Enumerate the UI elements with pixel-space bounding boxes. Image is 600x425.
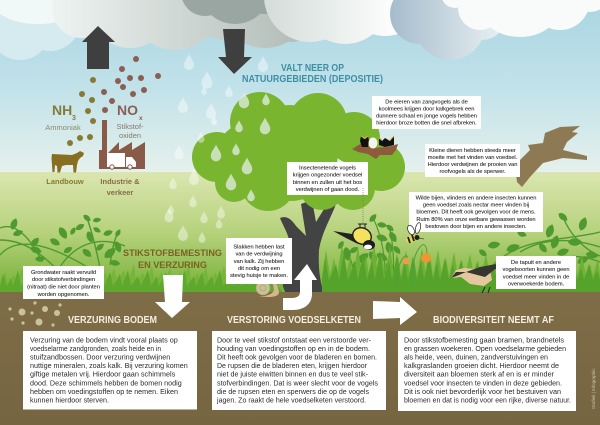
label: NH3 ammonia — [45, 102, 81, 132]
cloud: right white — [441, 0, 600, 37]
panel: food chain disruption — [212, 331, 386, 410]
callout: small animals: roofvogels als de sperwer. — [439, 169, 506, 175]
heading: deposition: VALT NEER OP — [281, 63, 344, 74]
callout: wheatear — [496, 256, 576, 289]
panel: soil acidification: Verzuring van de bodem vindt vooral plaats op — [30, 338, 178, 344]
cloud: left white — [0, 0, 85, 24]
icon: bird of prey — [516, 126, 587, 187]
callout: groundwater: (nitraat) die niet door planten — [27, 284, 100, 290]
callout: bees and butterflies — [409, 192, 543, 232]
label: industry and traffic — [100, 177, 140, 197]
panel: biodiversity declines: en grassen woekeren. Open voedselarme gebieden — [404, 346, 566, 353]
label: NH3 ammonia: 3 — [72, 115, 76, 122]
callout: groundwater — [23, 266, 104, 299]
icon: snail — [253, 279, 279, 297]
plants: right — [478, 211, 600, 275]
soil particles — [8, 301, 62, 327]
callout: wheatear: De tapuit en andere — [511, 260, 561, 266]
label: NOx nitrogen oxides — [116, 102, 144, 140]
callout: eggs — [372, 96, 481, 129]
callout: snails — [226, 238, 292, 284]
panel: biodiversity declines: voedsel voor insecten te vinden in deze gebieden. — [404, 380, 562, 388]
icon: cow — [52, 151, 84, 172]
thread of hanging bird — [362, 188, 364, 224]
callout: eggs: De eieren van zangvogels als de — [385, 100, 468, 106]
heading: deposition: NATUURGEBIEDEN (DEPOSITIE) — [242, 74, 383, 85]
heading: fertilisation and acidification: EN VERZURING — [138, 260, 207, 271]
panel: soil acidification: voedselarme zandgronden, zoals heide en in — [30, 346, 161, 353]
callout: eggs: hierdoor broze botten die snel afbreken. — [376, 120, 477, 126]
callout: wheatear: voedsel meer vinden in de — [503, 274, 569, 280]
label: NH3 ammonia: Ammoniak — [45, 123, 81, 132]
cloud: left pale — [0, 0, 81, 60]
tree trunk — [279, 200, 336, 293]
icon: factory with truck — [99, 120, 145, 169]
callout: insect-eating birds: Insectenetende vogels — [299, 166, 356, 172]
callout: insect-eating birds: binnen en zullen uit het bos — [293, 180, 362, 186]
callout: snails: van de verdwijning — [235, 252, 283, 258]
panel: biodiversity declines: bloemen en dat is nodig voor een rijke, diverse natuur. — [404, 398, 571, 404]
panel: food chain disruption: Door te veel stikstof ontstaat een verstoorde ver- — [217, 338, 372, 344]
icon: orange flowers — [397, 245, 431, 285]
panel: soil acidification — [23, 331, 197, 410]
icon: nest with chicks — [352, 136, 398, 159]
callout: snails: dit nodig om een — [238, 266, 280, 272]
icon: wheatear bird — [451, 262, 507, 293]
callout: snails: van kalk. Zij hebben — [234, 259, 284, 265]
panel: food chain disruption: stofverbindingen. Dat is weer slecht voor de vogels — [217, 380, 378, 388]
panel: soil acidification: dood. Deze schimmels hebben de bomen nodig — [30, 380, 182, 388]
callout: groundwater: Grondwater raakt vervuild — [31, 270, 96, 276]
callout: bees and butterflies: geen voedsel zoals nectar meer vinden bij — [423, 202, 529, 208]
panel: biodiversity declines: Dit is ook niet bevorderlijk voor het bestuiven van — [404, 389, 561, 396]
callout: insect-eating birds — [287, 162, 368, 195]
callout: wheatear: vogelsoorten kunnen geen — [502, 267, 570, 273]
panel: biodiversity declines: kalkgraslanden groeien dicht. Hierdoor neemt de — [404, 363, 559, 370]
panel: biodiversity declines: Door stikstofbemesting gaan bramen, brandnetels — [404, 338, 565, 344]
sky background — [0, 0, 600, 173]
panel: food chain disruption: niet de juiste eiwitten binnen en dus te veel stik- — [217, 372, 369, 378]
heading: biodiversity declines: BIODIVERSITEIT NEEMT AF — [433, 314, 555, 326]
callout: bees and butterflies: Wilde bijen, vlinders en andere insecten kunnen — [416, 196, 536, 202]
cloud: blue-grey — [390, 0, 506, 60]
heading: deposition — [242, 63, 383, 85]
soil — [0, 292, 600, 425]
label: industry and traffic: Industrie & — [100, 177, 140, 186]
callout: groundwater: door stikstofverbindingen — [32, 277, 95, 283]
heading: food chain disruption: VERSTORING VOEDSELKETEN — [227, 314, 361, 326]
callout: eggs: dunnere schaal en jonge vogels hebben — [376, 114, 477, 120]
callout: insect-eating birds: krijgen ongezonder voedsel — [293, 172, 362, 178]
grass: left — [0, 264, 286, 294]
callout: bees and butterflies: Ruim 80% van onze eetbare gewassen worden — [416, 217, 536, 223]
panel: soil acidification: stuifzandbossen. Door verzuring verdwijnen — [30, 354, 170, 362]
heading: fertilisation and acidification — [123, 248, 222, 271]
panel: biodiversity declines: diversiteit aan bloemen sterk af en is er minder — [404, 372, 555, 378]
callout: groundwater: worden opgenomen. — [37, 292, 90, 298]
label: NOx nitrogen oxides: oxiden — [119, 131, 141, 140]
panel: food chain disruption: Dit heeft ook gevolgen voor de bladeren en bomen. — [217, 354, 377, 362]
callout: small animals — [425, 144, 520, 177]
label: NOx nitrogen oxides: Stikstof- — [116, 122, 144, 131]
heading: fertilisation and acidification: STIKSTOFBEMESTING — [123, 248, 222, 259]
grass: right — [322, 242, 600, 294]
arrow: down into soil — [155, 275, 190, 318]
panel: food chain disruption: jagen. Zo raakt de hele voedselketen verstoord. — [216, 398, 366, 404]
panel: food chain disruption: De rupsen die de bladeren eten, krijgen hierdoor — [217, 363, 368, 370]
callout: eggs: koolmees krijgen door kalkgebrek een — [379, 106, 474, 112]
panel: biodiversity declines — [398, 331, 576, 411]
arrow: right to biodiversity — [373, 297, 417, 325]
label: industry and traffic: verkeer — [107, 188, 133, 197]
cloud: large grey — [52, 0, 320, 50]
heading: soil acidification: VERZURING BODEM — [68, 314, 157, 326]
panel: soil acidification: nuttige mineralen, zoals kalk. Bij verzuring komen — [30, 363, 188, 370]
plants: left — [0, 213, 125, 274]
arrow: deposition down — [218, 29, 252, 74]
rain drops on crown — [211, 92, 270, 201]
cloud: center white — [264, 0, 425, 44]
callout: insect-eating birds: verdwijnen of gaan dood. — [296, 187, 360, 193]
panel: biodiversity declines: als heide, veen, duinen, zandverstuivingen en — [404, 354, 548, 362]
meadow background — [0, 172, 600, 294]
arrow: curved up to tree — [283, 264, 317, 310]
callout: small animals: Hierdoor verdwijnen de prooien van — [428, 162, 517, 168]
label: agriculture: Landbouw — [46, 177, 84, 186]
callout: small animals: moeite met het vinden van voedsel. — [428, 155, 518, 161]
label: NH3 ammonia: NH — [52, 102, 72, 118]
cloud: dark grey — [181, 0, 293, 24]
icon: bee — [405, 222, 424, 244]
panel: food chain disruption: die de rupsen eten en sperwers die op de vogels — [217, 389, 369, 396]
callout: wheatear: overwoekerde bodem. — [508, 282, 565, 288]
callout: small animals: Kleine dieren hebben steeds meer — [429, 148, 516, 154]
callout: snails: stevig huisje te maken. — [230, 273, 288, 279]
panel: soil acidification: kunnen hierdoor sterven. — [30, 398, 109, 404]
rain drops — [164, 54, 268, 243]
panel: food chain disruption: houding van voedingstoffen op en in de bodem. — [217, 346, 370, 353]
panel: soil acidification: hebben om voedingstoffen op te nemen. Eiken — [30, 389, 178, 396]
plants: center nettles — [337, 213, 402, 285]
callout: snails: Slakken hebben last — [233, 244, 285, 250]
label: NOx nitrogen oxides: NO — [117, 102, 138, 118]
panel: soil acidification: giftige metalen vrij. Hierdoor gaan schimmels — [30, 372, 176, 378]
label: NOx nitrogen oxides: x — [139, 115, 143, 122]
callout: bees and butterflies: bloemen. Dit heeft ook gevolgen voor de mens. — [416, 210, 536, 216]
tree crown — [192, 92, 405, 211]
credit: Grafiek | Infographic — [591, 368, 596, 409]
cloud band — [0, 0, 600, 60]
particles rising — [67, 56, 161, 146]
callout: bees and butterflies: bestoven door bijen en andere insecten. — [425, 224, 527, 230]
icon: hanging great tit — [333, 224, 375, 250]
arrow: emissions up — [82, 26, 115, 69]
